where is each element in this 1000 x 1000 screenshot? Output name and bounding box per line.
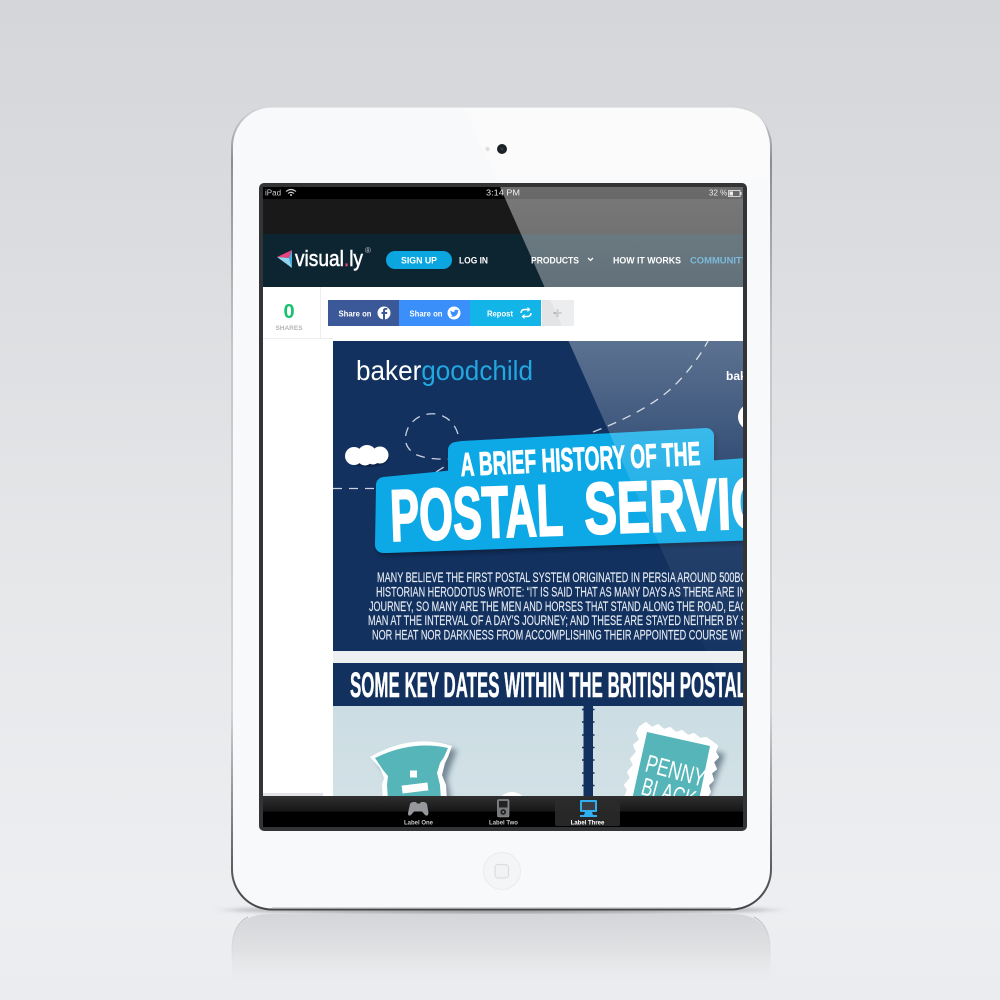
glare on bezel [465,108,769,180]
stamp: pillar box [370,741,457,804]
share counter: SHARES [275,325,303,332]
dashed flight paths [333,341,708,488]
bakergoodchild logo: bakergoodchild [356,355,533,386]
more button [542,300,574,326]
status bar: iPad [265,188,281,198]
registered mark: ® [365,246,371,255]
home button [484,852,520,890]
panel: infographic header [333,341,743,651]
title line one: A BRIEF HISTORY OF THE [460,435,701,483]
glass glare [500,187,743,618]
intro paragraph: HISTORIAN HERODOTUS WROTE: “IT IS SAID THAT AS MANY DAYS AS THERE ARE IN [376,584,746,600]
tab: label two [489,800,518,826]
repost button [470,300,541,326]
tab: label three: Label Three [571,820,605,826]
share counter: 0 [283,301,295,323]
products link: PRODUCTS [531,256,579,266]
navigation bar [263,234,748,287]
community link: COMMUNITY [690,256,748,266]
tab bar [263,796,743,827]
round marker [502,792,522,796]
log in link: LOG IN [459,256,488,266]
tab: label one: Label One [404,820,434,826]
how it works link: HOW IT WORKS [613,256,681,266]
intro paragraph: MANY BELIEVE THE FIRST POSTAL SYSTEM ORIGINATED IN PERSIA AROUND 500BC [377,570,747,585]
key dates heading [333,663,747,706]
browser toolbar [263,199,743,234]
stamp: penny black [624,722,728,796]
page content [263,287,743,796]
icon: cloud [345,445,389,467]
sign up button [386,251,452,269]
share counter [276,304,302,330]
products link [532,257,594,264]
sign up button: SIGN UP [401,256,437,266]
stamp: penny black: BLACK [638,773,699,814]
title line two [392,477,743,542]
icon: visual.ly logo [277,250,292,268]
screen [263,187,743,827]
intro paragraph: MAN AT THE INTERVAL OF A DAY'S JOURNEY; AND THESE ARE STAYED NEITHER BY S [368,613,747,628]
intro paragraph: JOURNEY, SO MANY ARE THE MEN AND HORSES THAT STAND ALONG THE ROAD, EAC [369,599,747,614]
front camera [485,144,507,154]
title line two: POSTAL [389,470,564,557]
tab: label three [571,800,605,826]
status bar: 32 % [709,188,727,198]
share on facebook button [328,300,399,326]
perforated timeline [582,706,594,796]
intro paragraph: NOR HEAT NOR DARKNESS FROM ACCOMPLISHING THEIR APPOINTED COURSE WIT [372,628,747,642]
tab: label one [404,802,433,824]
intro paragraph [368,570,747,642]
tab: label two: Label Two [489,820,518,826]
share on facebook button: Share on [338,308,372,318]
panel: key dates [333,663,743,796]
status bar [263,187,743,199]
selected tab highlight [555,804,620,826]
share on twitter button: Share on [410,308,442,318]
share on twitter button [399,300,470,326]
round cloud at right [738,406,743,428]
status bar: 3:14 PM [486,188,520,198]
logo text: visual.ly [295,246,363,271]
title badge [383,435,800,557]
cookie strip [263,793,323,796]
tablet reflection [211,905,791,985]
repost button: Repost [487,308,513,318]
screen frame [259,183,747,831]
title line two: SERVICE [583,462,800,550]
stamp: penny black: PENNY [642,750,709,793]
light separator band [333,651,743,663]
tablet body [232,106,771,910]
clipped logo copy: bak [726,369,747,383]
